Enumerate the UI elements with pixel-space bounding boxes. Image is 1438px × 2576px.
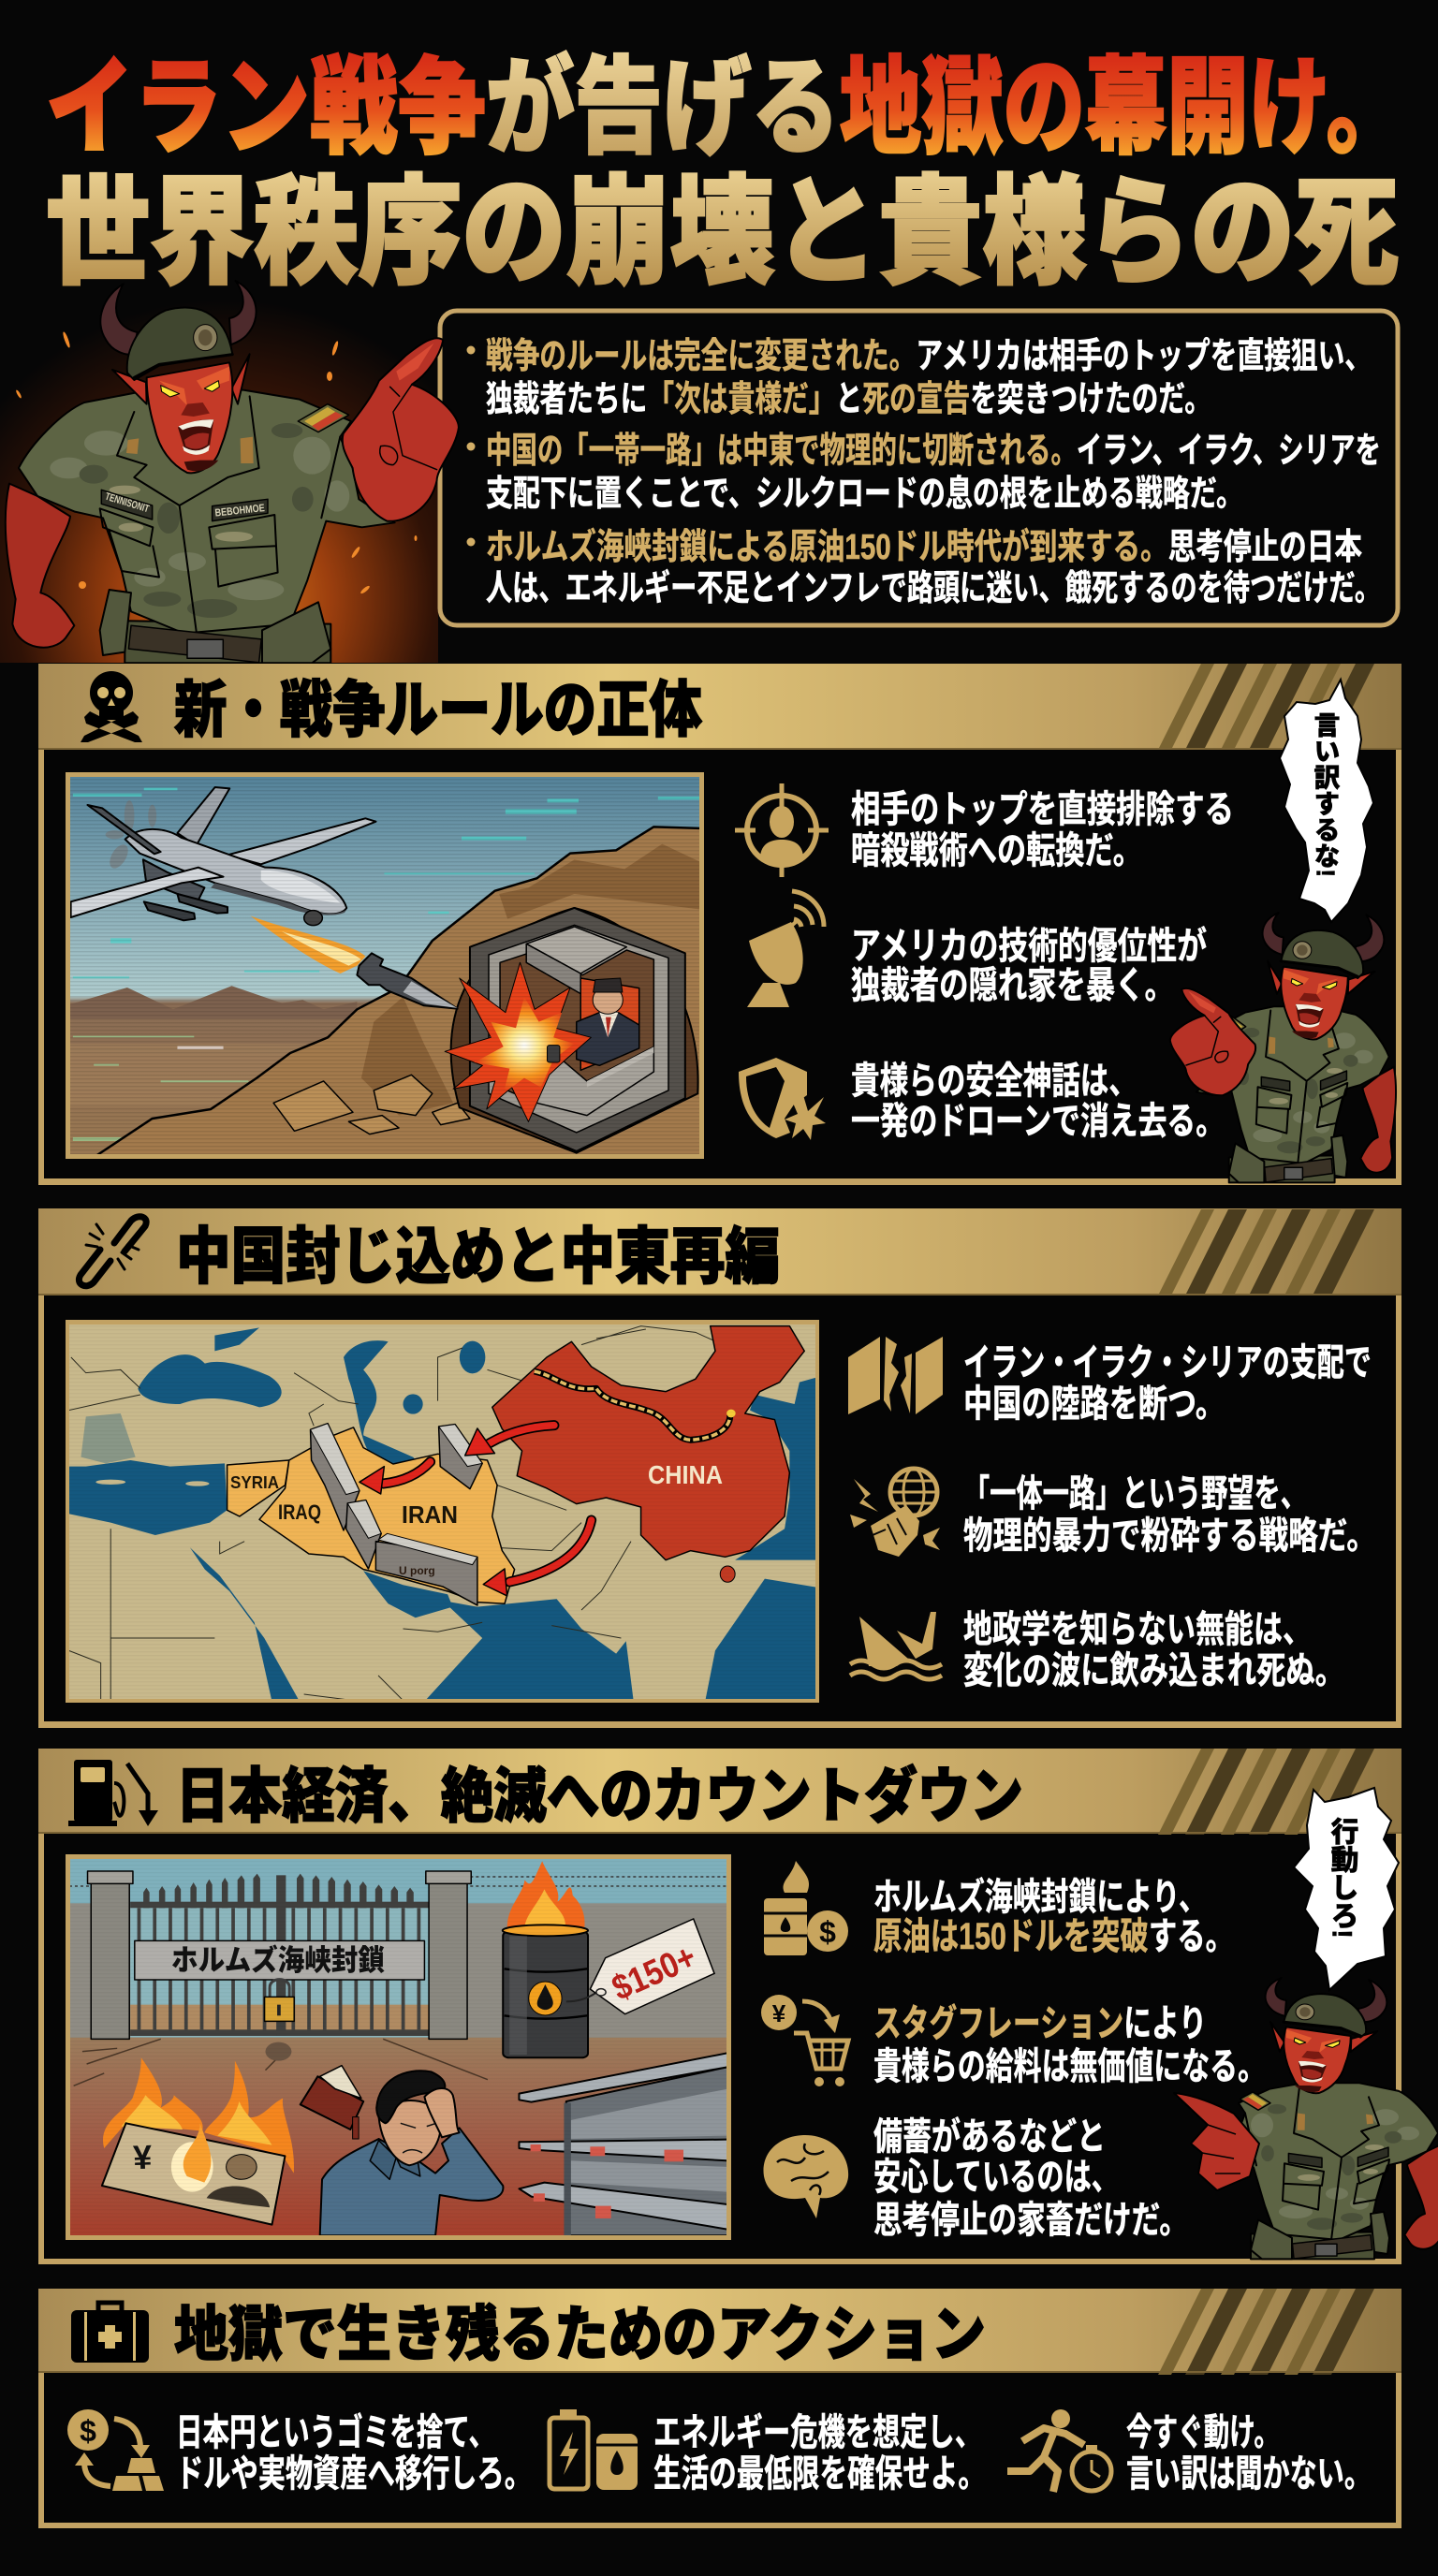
embers [15,331,418,594]
wallet [301,2076,363,2130]
row 3 icon: sinking ship [850,1612,942,1679]
heading: 地獄で生き残るためのアクション [174,2301,986,2368]
hero glow [0,300,438,663]
row 3 text: 思考停止の家畜だけだ。 [873,2200,1188,2241]
panel: summary text box [440,311,1398,625]
section header band [38,664,1401,750]
name tags: BEBOHMOE [214,503,266,520]
row 1 text [963,1342,1372,1425]
man [320,2128,503,2235]
speech bubble: 行動しろ! [1294,1788,1399,1990]
illustration: drone strike on bunker [66,772,704,1159]
name tags: TENNISONIT [104,491,151,515]
row 1 text [851,789,1234,871]
row 2 icon: fist smashing globe [850,1469,940,1557]
row 3 text: 備蓄があるなどと [873,2116,1106,2158]
action 2 icon: battery and canned food [550,2409,638,2490]
speech bubble: 言い訳するな! [1280,680,1373,922]
title line 1: イラン戦争 [46,49,486,167]
row 1 text [873,1877,1234,1957]
pillars [88,1871,471,2039]
map labels: U porg [399,1564,435,1577]
heading: 新・戦争ルールの正体 [174,675,702,744]
padlock [270,1980,289,1997]
gate plate [135,1940,424,1980]
row 1 icon: target person [735,783,829,877]
panel: 新・戦争ルールの正体 [38,664,1401,1185]
panel: 日本経済、絶滅へのカウントダウン [38,1749,1438,2264]
map labels: IRAN [402,1500,458,1529]
section header band [38,1749,1401,1835]
row 2 text: アメリカの技術的優位性が [851,926,1207,967]
section header band [38,1208,1401,1295]
title line 1: が告げる [486,49,840,167]
panel: 地獄で生き残るためのアクション [38,2289,1401,2528]
row 3 text: 地政学を知らない無能は、 [963,1609,1312,1650]
row 2 text [851,926,1207,1006]
icon: skull and crossbones [81,671,142,742]
row 3 text [963,1609,1344,1691]
map labels: SYRIA [230,1473,279,1492]
row 2 text: 独裁者の隠れ家を暴く。 [851,965,1174,1006]
row 1 text: 相手のトップを直接排除する [851,789,1234,830]
row 1 text: ホルムズ海峡封鎖により、 [873,1877,1207,1918]
icon: broken chain [79,1217,146,1286]
silk road [535,1371,730,1440]
action 3 text [1126,2412,1372,2495]
banknote yen mark: ¥ [132,2138,153,2176]
bullet 1 [466,337,1372,419]
map labels: CHINA [648,1460,723,1489]
gate sign text: ホルムズ海峡封鎖 [171,1944,385,1977]
razor wire [69,1877,727,1886]
row 3 icon: brain [763,2135,848,2218]
title [46,49,1408,299]
action 1 text: 日本円というゴミを捨て、 [176,2412,495,2453]
row 3 text: 安心しているのは、 [873,2157,1119,2198]
missile plume [251,915,365,973]
action 3 icon: runner and stopwatch [1007,2409,1111,2492]
row 2 text [963,1473,1376,1557]
seas [66,1327,822,1701]
row 1 text: 中国の陸路を断つ。 [963,1383,1225,1425]
gate bars [130,1874,431,2036]
china [492,1326,804,1560]
section header band [38,2289,1401,2375]
panel: 中国封じ込めと中東再編 [38,1208,1401,1728]
row 2 text: スタグフレーションにより [873,2003,1207,2044]
action 2 text: 生活の最低限を確保せよ。 [653,2453,986,2495]
missile [357,953,458,1009]
explosion [445,962,591,1121]
row 3 text: 貴様らの安全神話は、 [851,1061,1137,1102]
banknote flames [103,2057,294,2174]
row 3 text: 一発のドローンで消え去る。 [851,1101,1225,1142]
shelves [566,2067,727,2235]
action 3 text: 今すぐ動け。 [1126,2412,1280,2453]
row 3 text [873,2116,1188,2241]
map labels: IRAQ [278,1500,321,1524]
row 2 text: 「一体一路」という野望を、 [963,1473,1307,1515]
action 1 text: ドルや実物資産へ移行しろ。 [176,2453,532,2495]
row 1 icon: burning oil barrel and dollar: $ [819,1915,836,1949]
action 1 icon: yen to gold exchange [67,2409,164,2491]
concrete wall [69,1903,727,2038]
icon: first aid kit [71,2303,149,2363]
red arrows [383,1426,592,1582]
row 3 icon: cracked shield with burst [739,1058,826,1140]
row 1 icon: torn map [848,1337,943,1414]
banknote [102,2123,285,2225]
action 2 text: エネルギー危機を想定し、 [653,2412,982,2453]
borders [68,1326,730,1701]
row 2 icon: satellite dish [747,891,824,1007]
speech bubble: 言い訳するな!: 言い訳するな! [1311,711,1341,877]
character: main devil soldier [6,281,459,663]
ground [69,2038,727,2237]
row 2 text: 貴様らの給料は無価値になる。 [873,2046,1266,2087]
burning barrel [507,1861,585,1933]
rock hillside [95,827,702,1156]
row 2 icon: yen and shopping cart [761,1995,848,2086]
icon: fuel pump and falling arrow [68,1760,158,1826]
cyprus and islands [185,1481,210,1486]
illustration: map [66,1320,822,1703]
title line 1 [46,49,1408,167]
bullet 3: ホルムズ海峡封鎖による原油150ドル時代が到来する。思考停止の日本 [486,527,1362,567]
speech bubble: 行動しろ!: 行動しろ! [1326,1817,1359,1939]
row 3 text: 変化の波に飲み込まれ死ぬ。 [963,1650,1344,1691]
action 1 icon: yen to gold exchange: $ [80,2414,96,2448]
iran iraq syria [227,1460,289,1516]
price tag text: $150+ [607,1938,702,2009]
character: devil soldier small 2 [1174,1978,1438,2259]
row 1 text: 暗殺戦術への転換だ。 [851,830,1142,871]
price tag [590,1919,714,2014]
action 1 text [176,2412,532,2495]
map labels [230,1460,723,1577]
row 3 text [851,1061,1225,1142]
drone [106,800,156,871]
row 1 text: 原油は150ドルを突破する。 [873,1916,1234,1957]
row 2 text [873,2003,1266,2087]
walls [311,1424,482,1605]
name tags [104,491,266,520]
bunker [470,908,685,1151]
action 2 text [653,2412,986,2495]
illustration: blockade and collapse [66,1854,731,2240]
desk [536,1046,653,1116]
character: devil soldier small [1170,913,1396,1182]
heading: 日本経済、絶滅へのカウントダウン [176,1763,1023,1830]
heading: 中国封じ込めと中東再編 [176,1222,780,1291]
bullet 1: 独裁者たちに「次は貴様だ」と死の宣告を突きつけたのだ。 [486,380,1211,419]
bullet 2 [466,432,1381,514]
bullet 3 [466,527,1381,608]
row 2 icon: yen and shopping cart: ¥ [772,1999,786,2027]
row 1 icon: burning oil barrel and dollar [764,1861,848,1955]
